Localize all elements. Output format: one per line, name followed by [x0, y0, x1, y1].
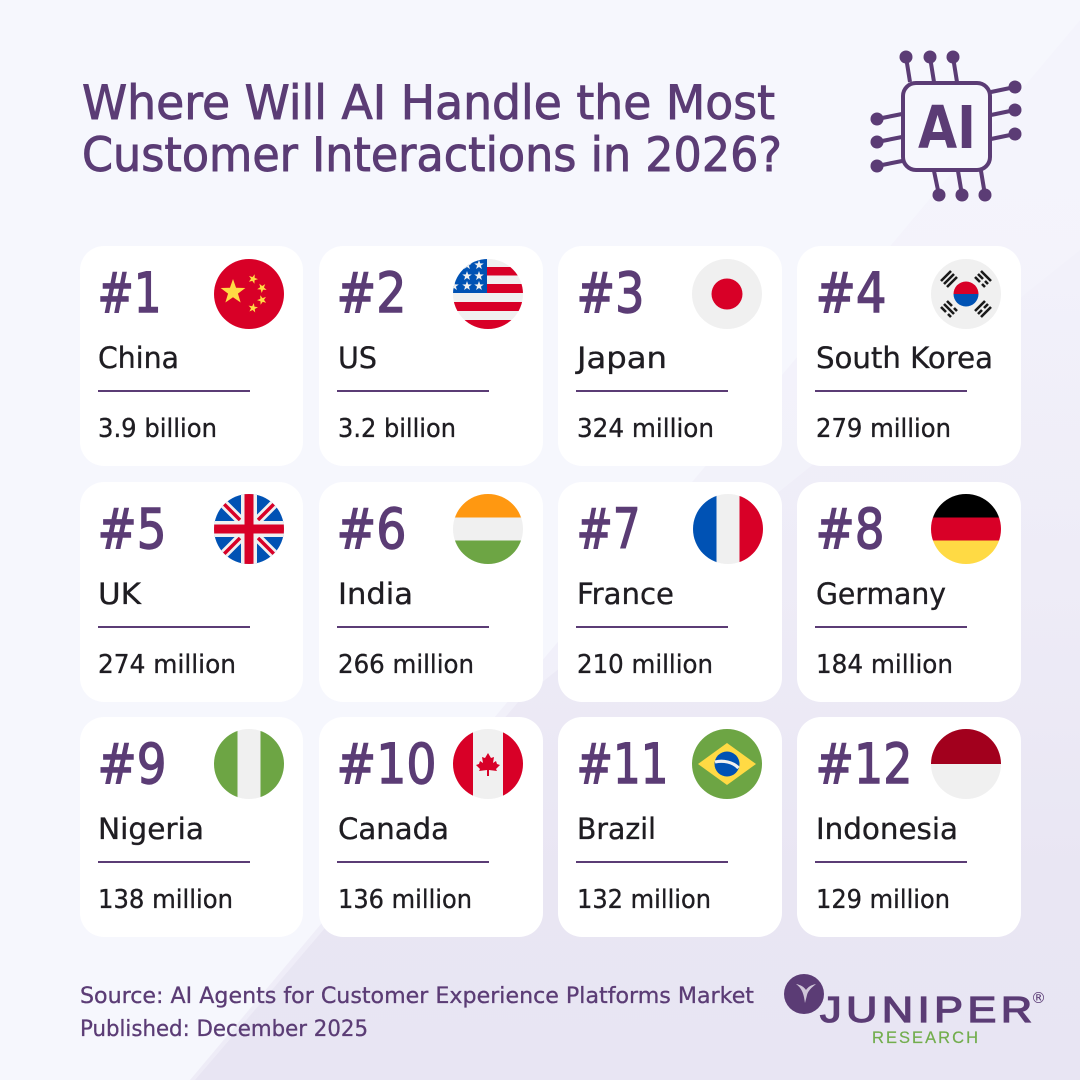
panel: #6 India: #6 — [336, 497, 406, 561]
panel: #4 South Korea: #4 — [816, 261, 886, 325]
icon: flag of Nigeria — [214, 729, 284, 799]
panel: #4 South Korea — [797, 246, 1021, 466]
icon: flag of Japan — [692, 259, 762, 329]
panel: #7 France: 210 million — [577, 650, 713, 680]
panel: #5 UK — [80, 482, 303, 702]
panel: #11 Brazil: 132 million — [577, 885, 711, 915]
panel: #1 China: 3.9 billion — [98, 414, 217, 444]
panel: #3 Japan: Japan — [575, 341, 667, 375]
logo: Juniper Research: JUNIPER — [820, 990, 1032, 1030]
icon: flag of France — [693, 494, 764, 564]
panel: #10 Canada: 136 million — [338, 885, 472, 915]
panel: #6 India — [319, 482, 543, 702]
panel: #5 UK: #5 — [98, 497, 166, 561]
panel: #2 US: US — [338, 341, 377, 375]
panel: #12 Indonesia: 129 million — [816, 885, 950, 915]
panel: #6 India: India — [338, 577, 413, 611]
panel: #1 China: #1 — [98, 261, 162, 325]
icon: flag of Canada — [453, 729, 523, 799]
panel: #2 US — [319, 246, 543, 466]
panel: #7 France: France — [577, 577, 674, 611]
logo: Juniper Research — [784, 974, 1046, 1047]
title: Where Will AI Handle the Most — [82, 76, 775, 131]
panel: #8 Germany — [797, 482, 1021, 702]
title: Customer Interactions in 2026? — [82, 128, 782, 183]
panel: #6 India: 266 million — [338, 650, 474, 680]
panel: #4 South Korea: 279 million — [816, 414, 951, 444]
panel: #8 Germany: 184 million — [816, 650, 953, 680]
source note — [80, 984, 754, 1042]
icon: flag of Germany — [931, 494, 1001, 564]
logo: Juniper Research: ® — [1031, 989, 1046, 1007]
icon: flag of China — [214, 259, 284, 329]
icon: flag of India — [453, 494, 523, 564]
icon: flag of Indonesia — [931, 729, 1001, 799]
panel: #3 Japan: #3 — [576, 261, 644, 325]
panel: #1 China — [80, 246, 303, 466]
panel: #8 Germany: Germany — [816, 577, 946, 611]
panel: #10 Canada: Canada — [338, 812, 449, 846]
title — [82, 76, 782, 183]
panel: #12 Indonesia: Indonesia — [816, 812, 958, 846]
panel: #9 Nigeria: 138 million — [98, 885, 233, 915]
panel: #11 Brazil — [558, 717, 782, 937]
panel: #11 Brazil: #11 — [576, 732, 668, 796]
panel: #4 South Korea: South Korea — [816, 341, 993, 375]
icon: flag of US — [449, 259, 523, 329]
source note: Published: December 2025 — [80, 1017, 368, 1042]
icon: flag of Brazil — [692, 729, 762, 799]
panel: #3 Japan — [558, 246, 782, 466]
panel: #11 Brazil: Brazil — [577, 812, 656, 846]
panel: #12 Indonesia — [797, 717, 1021, 937]
icon: AI chip: AI — [918, 93, 976, 162]
logo: Juniper Research: RESEARCH — [872, 1029, 978, 1047]
panel: #5 UK: 274 million — [98, 650, 236, 680]
panel: #12 Indonesia: #12 — [816, 732, 912, 796]
panel: #9 Nigeria: Nigeria — [98, 812, 204, 846]
icon: flag of UK — [214, 494, 284, 564]
panel: #5 UK: UK — [98, 577, 142, 611]
panel: #9 Nigeria — [80, 717, 303, 937]
panel: #7 France — [558, 482, 782, 702]
panel: #9 Nigeria: #9 — [98, 732, 166, 796]
panel: #2 US: #2 — [336, 261, 406, 325]
panel: #7 France: #7 — [576, 497, 640, 561]
panel: #3 Japan: 324 million — [577, 414, 714, 444]
source note: Source: AI Agents for Customer Experience Platforms Market — [80, 984, 754, 1009]
panel: #10 Canada — [319, 717, 543, 937]
panel: #1 China: China — [98, 341, 179, 375]
panel: #2 US: 3.2 billion — [338, 414, 456, 444]
panel: #10 Canada: #10 — [336, 732, 436, 796]
icon: flag of South Korea — [931, 259, 1001, 329]
icon: AI chip — [870, 50, 1022, 202]
panel: #8 Germany: #8 — [816, 497, 884, 561]
